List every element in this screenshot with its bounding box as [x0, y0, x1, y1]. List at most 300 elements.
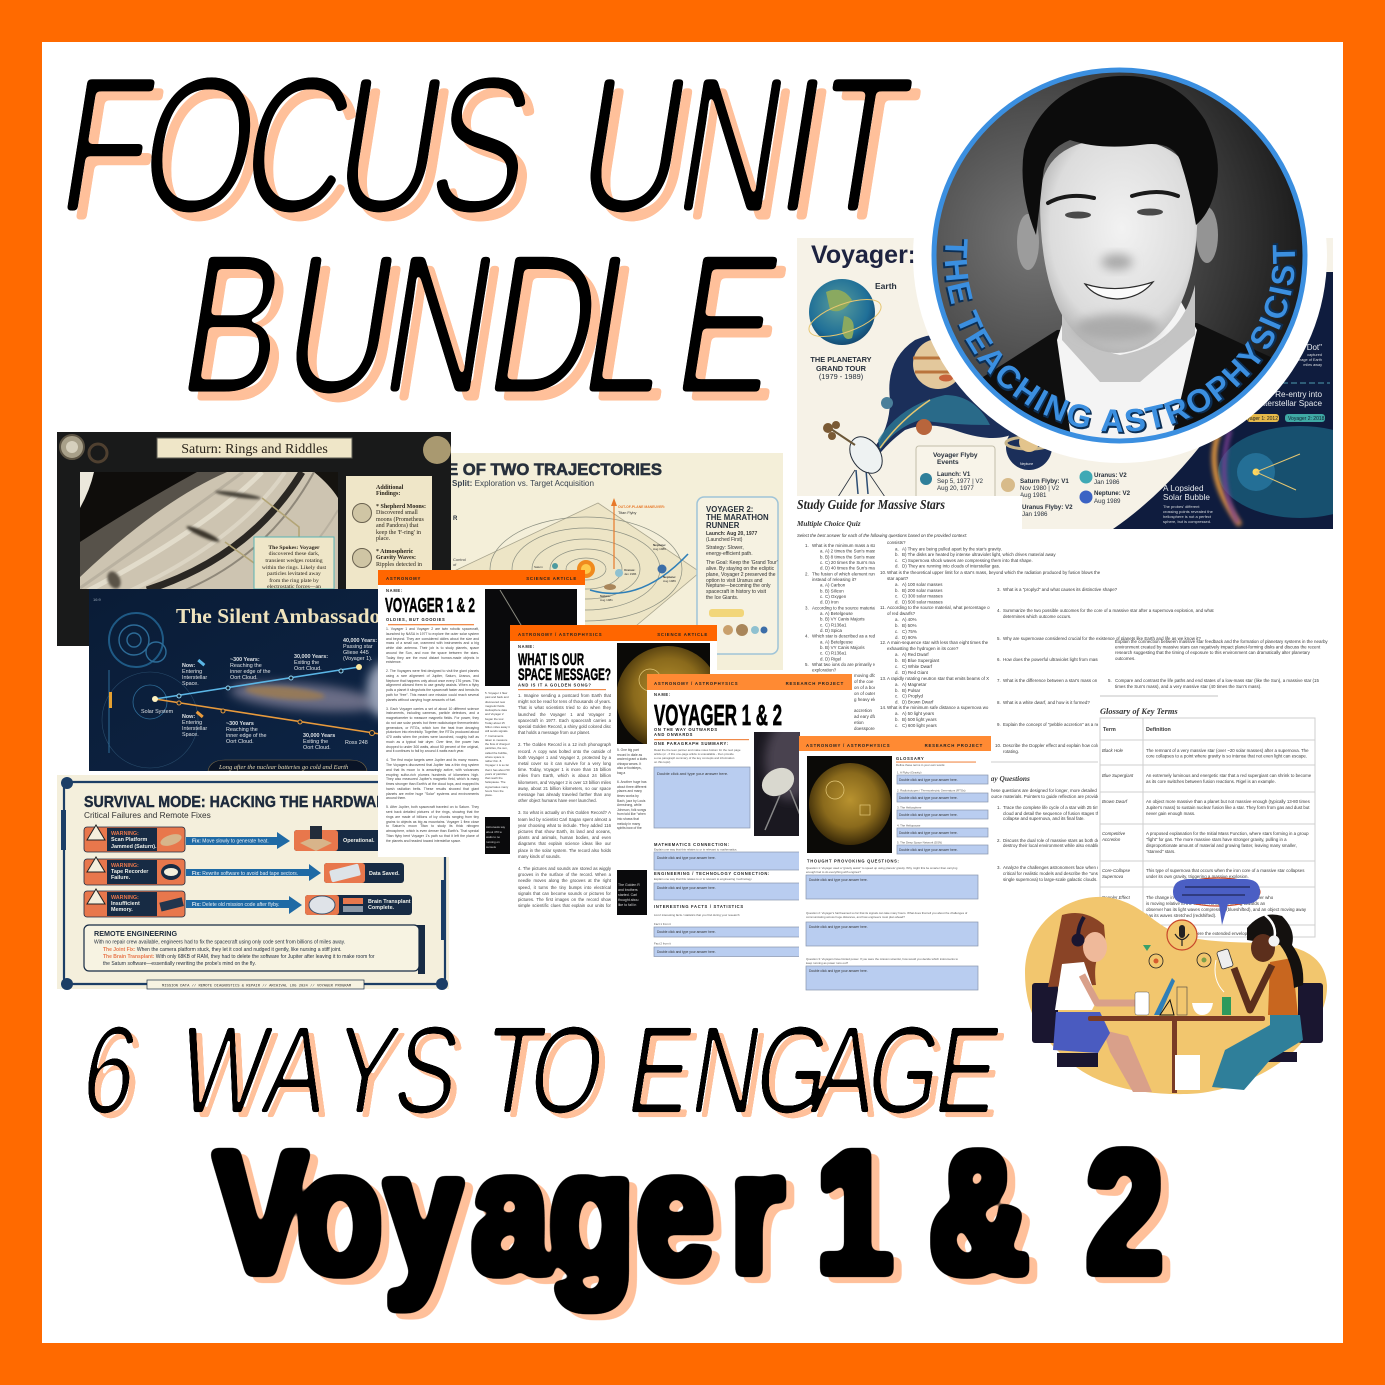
glossary table: An object more massive than a planet but not massive enough (typically 13-80 times	[1146, 799, 1311, 804]
section: glossary: 2. Radioisotopes / Thermoelectric Generators (RTGs)	[897, 788, 966, 792]
header bar: astronomy	[378, 570, 585, 585]
callout: the spokes: transient wedges rotating	[265, 558, 323, 564]
sheet title: VOYAGER 1 & 2	[654, 700, 782, 732]
panel: study guide for massive stars: C) 75%	[902, 629, 917, 634]
quiz column one: b.	[820, 554, 824, 559]
panel: study guide for massive stars: single supernova) to large-scale galactic clouds.	[1003, 877, 1097, 882]
nose shading	[1101, 254, 1133, 270]
callout: remote engineering: The Joint Fix: When the camera platform stuck, they let it cool and nudged it gently, like nursing a stiff joint.	[103, 947, 342, 953]
panel: study guide for massive stars: ource materials. Pointers to guide reflection are provided	[991, 794, 1103, 799]
quiz column one: ad eary dfc	[854, 714, 877, 719]
label: uranus flyby: Jan 1986	[1022, 511, 1048, 518]
shirt	[1057, 300, 1197, 445]
label: aspect ratio: 16:9	[93, 597, 102, 602]
icon: microphone badge	[1167, 920, 1197, 950]
quiz column one: According to the source material,	[812, 605, 877, 610]
panel: two trajectories slide	[451, 453, 783, 670]
panel: additional findings	[346, 476, 432, 591]
heading plaque: saturn: Saturn: Rings and Riddles	[181, 442, 328, 457]
sheet: what is our space message: thought abou	[618, 898, 638, 902]
panel: study guide for massive stars: D) 90%	[902, 635, 917, 640]
chin shading	[1075, 314, 1159, 342]
icon: compass rose	[423, 436, 451, 464]
orbital plane diagram: Aug 1989	[663, 579, 676, 583]
panel: additional findings: Gravity Waves:	[376, 555, 416, 561]
glossary table: has its waves stretched (redshifted).	[1146, 913, 1216, 918]
short answer questions: determines which outcome occurs.	[1003, 614, 1071, 619]
title: 6 ways to engage: 6 WAYS TO ENGAGE	[79, 1006, 1016, 1145]
row: scan platform: WARNING:	[111, 831, 139, 837]
glossary table: A class of star systems where the extended envelope from the	[1146, 931, 1267, 936]
callout: remote engineering: the Saturn software—essentially rewriting the probe's mind on the fly.	[103, 961, 256, 967]
sheet: voyager 1 and 2 science article: about 470 w	[486, 830, 503, 834]
row: tape recorder: Tape Recorder	[111, 869, 149, 875]
panel: study guide for massive stars: Trace the complete life cycle of a star with 25 times the	[1003, 805, 1111, 810]
sheet: golden record research project	[799, 736, 991, 992]
panel: study guide for massive stars: 14.	[880, 705, 886, 710]
timeline labels: Interstellar	[182, 726, 207, 732]
sheet: voyager 1 and 2 science article: NAME:	[386, 588, 403, 593]
panel: the silent ambassadors slide	[89, 589, 403, 771]
glossary table: "starved" stars.	[1146, 849, 1175, 854]
title: voyager 1 and 2: Voyager 1 & 2	[214, 1114, 1164, 1311]
image: golden record	[807, 756, 892, 853]
section: engineering connection	[654, 871, 800, 900]
quiz column one: exploration?	[812, 668, 837, 673]
heading: voyager: Voyager: The Grand Tour	[811, 241, 1109, 269]
caption: nuclear batteries	[208, 760, 367, 771]
panel: two trajectories slide: Control	[453, 557, 466, 562]
quiz column two: b.	[895, 588, 899, 593]
sheet title: VOYAGER 1 & 2	[385, 595, 475, 617]
panel: study guide for massive stars: a.	[895, 617, 899, 622]
panel: study guide for massive stars: Analyze the challenges astronomers face when modeling	[1003, 865, 1116, 870]
panel: survival mode slide	[57, 775, 449, 990]
row: insufficient memory: Memory.	[111, 907, 133, 913]
row: scan platform: Fix: Move slowly to generate heat.	[192, 838, 269, 844]
panel: study guide for massive stars: c.	[895, 629, 898, 634]
timeline labels: Gliese 445	[343, 650, 369, 656]
timeline labels: Reaching the	[226, 727, 258, 733]
section: glossary: GLOSSARY	[896, 756, 924, 761]
panel: voyager 2 marathon runner: option to visit Uranus and	[706, 578, 763, 584]
article body: 4. The first major targets were Jupiter and its many moons. The Voyagers discovered that Jupiter has a thin ring system and that its moon Io is amazingly active, with volcanoes erupting sulfur-rich plumes hundreds of kilometers high. They also measured Jupiter's magnetic field, which is many times stronger than Earth's at the cloud tops, and mapped its harsh radiation belts. These results showed that giant planets are entire huge "Solar" systems and environments around them.	[386, 758, 479, 800]
sheet: voyager 1 and 2 science article: sunsets	[486, 845, 497, 849]
eyebrows	[1048, 192, 1178, 203]
quiz column one: C) R136a1	[825, 651, 847, 656]
header bar	[799, 736, 991, 751]
orbital plane diagram: Jan 1986	[624, 572, 637, 576]
subheading: multiple choice quiz: Multiple Choice Quiz	[796, 520, 861, 528]
panel: study guide for massive stars: What is the minimum safe distance a supernova wo	[887, 705, 989, 710]
article body	[518, 693, 611, 909]
quiz column two: C) 300 solar masses	[902, 594, 943, 598]
section: interesting facts: Double click and type your answer here.	[657, 950, 716, 954]
sheet: what is our space message: SPACE MESSAGE?	[518, 666, 611, 684]
panel: additional findings: and Pandora) that	[376, 522, 419, 529]
quiz column one: d.	[820, 600, 824, 605]
quiz column two: What is the theoretical upper limit for a star's mass, beyond which the radiation produced by fusion blows the	[887, 570, 1101, 575]
panel: study guide for massive stars: b.	[895, 623, 899, 628]
panel: flyby events: Launch: V1	[937, 471, 971, 478]
quiz column one: a.	[820, 611, 824, 616]
panel: additional findings: keep the 'F-ring' in	[376, 530, 421, 536]
quiz column one: b.	[820, 617, 824, 622]
figure: left listener	[1048, 913, 1152, 1092]
panel: study guide for massive stars: 8.	[997, 700, 1001, 705]
section: mathematics connection: Explain one way that this relates to or is relevant to mathematics.	[654, 848, 737, 852]
timeline labels: Oort Cloud.	[294, 666, 322, 672]
quiz column one: c.	[820, 560, 823, 565]
label: uranus v2: Uranus: V2	[1094, 472, 1127, 479]
panel: voyager 2 marathon runner: (Launched First)	[706, 537, 743, 543]
glossary table: Supernova	[1102, 874, 1124, 879]
section: interesting facts: Double click and type your answer here.	[657, 930, 716, 934]
section: one paragraph summary: Read the the teen partner and make notes bottom for the next page	[654, 748, 741, 752]
timeline labels: (Voyager 1).	[343, 656, 372, 662]
article body	[386, 627, 479, 857]
icon: corner medallion	[60, 435, 107, 462]
glossary table: A proposed explanation for the Initial Mass Function, where stars forming in a group	[1146, 831, 1309, 836]
article body: 1. Voyager 1 and Voyager 2 are twin robotic spacecraft, launched by NASA in 1977 to explore the outer solar system and beyond. They are considered oldies about the size and mass of a small car, crammed with instruments and a big white dish antenna. Their job is to study planets, space around the Sun, and now the space between the stars. Today they are the most distant human-made objects in existence.	[386, 627, 479, 664]
timeline labels: Reaching the	[230, 663, 262, 669]
timeline labels: inner edge of the	[226, 733, 266, 739]
panel: study guide for massive stars: b.	[895, 717, 899, 722]
section: interesting facts: List 2 interesting facts / statistics that you find during your research:	[654, 913, 740, 917]
quiz column two: consists?	[887, 540, 906, 545]
panel: study guide for massive stars: How does the powerful ultraviolet light from massive stars	[1003, 657, 1117, 662]
caption: nuclear batteries: Long after the nuclear batteries go cold and Earth	[218, 764, 348, 771]
trajectory lines	[152, 664, 380, 736]
image: saturn ring close-up	[80, 472, 338, 600]
section: engineering connection: ENGINEERING / TECHNOLOGY CONNECTION:	[654, 871, 770, 876]
section: glossary: 4. The Heliopause	[897, 824, 921, 828]
panel: flyby events: Sep 5, 1977 | V2	[937, 478, 984, 485]
article body: 1. Imagine sending a postcard from Earth that might not be read for tens of thousands of years. That is what scientists tried to do when they launched the Voyager 1 and Voyager 2 spacecraft in 1977. Each spacecraft carries a special Golden Record, a shiny gold colored disc that holds a message from our planet.	[518, 693, 611, 735]
quiz column two: a.	[895, 582, 899, 587]
timeline labels: Entering	[182, 669, 202, 675]
quiz column one: A) 2 times the Sun's mass	[825, 549, 877, 554]
glossary table: An extremely luminous and energetic star that a red supergiant can shrink to become	[1146, 773, 1312, 778]
quiz column one: c.	[820, 594, 823, 599]
glossary table: Term	[1103, 727, 1116, 733]
panel: study guide for massive stars: cloud and detail the sequence of fusion stages through	[1003, 811, 1111, 816]
footer strip: mission data	[147, 980, 364, 989]
sheet: voyager 1 and 2 science article: running on	[486, 840, 500, 844]
curved name: THE TEACHING ASTROPHYSICIST	[944, 239, 1295, 432]
section: glossary	[896, 756, 988, 854]
section: glossary: 3. The Heliosphere	[897, 806, 922, 810]
section: one paragraph summary: a one paragraph summary of the key concepts and information	[654, 756, 735, 760]
sidebar text: 5. One big part record in diale as ancient grant a kiwis chirapa wears. It also w footsteps, bag a	[617, 748, 647, 775]
quiz column two: A) 100 solar masses	[902, 582, 943, 587]
panel: heliosphere: A Lopsided	[1163, 484, 1204, 493]
neck	[1062, 285, 1195, 382]
quiz column one: C) 20 times the Sun's mass	[825, 560, 880, 565]
section: glossary: Double click and type your answer here.	[899, 796, 958, 800]
quiz column one: c.	[820, 622, 823, 627]
quiz column one: D) Rigel	[825, 656, 841, 661]
panel: heliosphere: miles away	[1303, 363, 1322, 367]
timeline labels: 40,000 Years:	[343, 638, 377, 644]
panel: study guide for massive stars: What is the difference between a star's mass on the main	[1003, 678, 1116, 683]
quiz column one: accretion	[854, 708, 873, 713]
sidebar text	[617, 748, 647, 866]
panel: additional findings: moons (Prometheus	[376, 516, 424, 523]
panel: study guide for massive stars: d.	[895, 670, 899, 675]
quiz column one: b.	[820, 588, 824, 593]
glossary table: is moving relative to the source. An object moving towards an	[1146, 901, 1266, 906]
subheading: critical failures: Critical Failures and Remote Fixes	[84, 810, 211, 820]
label: planetary grand tour: (1979 - 1989)	[819, 372, 863, 381]
orbital plane diagram	[456, 498, 696, 625]
page: essay answers and glossary: 5.	[1108, 678, 1112, 683]
icons: heart and leaf badges	[1143, 945, 1211, 968]
callout: remote engineering: With no repair crew available, engineers had to fix the spacecraft using only code sent from billions of miles away.	[94, 940, 345, 946]
heading: the silent ambassadors: The Silent Ambassadors	[176, 604, 398, 628]
orbital plane diagram: Saturn:	[600, 594, 611, 598]
panel: study guide for massive stars: exhausting the hydrogen in its core?	[887, 646, 959, 651]
quiz column one: on of outer	[854, 691, 876, 696]
section: interesting facts: Fact 2 from it	[654, 942, 671, 946]
quiz column one: B) 8 times the Sun's mass	[825, 554, 877, 559]
panel: study guide for massive stars: Essay Questions	[979, 774, 1030, 783]
speech bubble	[1173, 878, 1260, 925]
glossary table: Doppler Effect	[1102, 895, 1131, 900]
curved name: THE TEACHING ASTROPHYSICIST	[942, 239, 1297, 434]
quiz column one: A) Betelgeuse	[825, 611, 853, 616]
panel: flyby events	[916, 446, 996, 496]
panel: voyager 2 marathon runner: plane, Voyager 2 preserved the	[706, 572, 776, 578]
callout: remote engineering: The Brain Transplant: With only 68KB of RAM, they had to delete the software for Jupiter after leaving it to make room for	[103, 954, 375, 960]
quiz column two	[880, 540, 1101, 604]
orbital plane diagram: Titan Flyby	[618, 511, 637, 515]
page: essay answers and glossary: research suggesting that the timing of exposure to this environment can dramatically alter planetary	[1115, 650, 1311, 655]
timeline labels: Oort Cloud.	[303, 745, 331, 751]
panel: heliosphere: captured	[1307, 353, 1322, 357]
icon: blueprint gears	[102, 613, 198, 768]
panel: voyager 2 marathon runner: RUNNER	[706, 521, 740, 530]
row: scan platform: Scan Platform	[111, 837, 147, 843]
footer strip: mission data: MISSION DATA // REMOTE DIAGNOSTICS & REPAIR // ARCHIVAL LOG 2024 // VOYAGER PROGRAM	[162, 984, 352, 988]
panel: study guide for massive stars: d.	[895, 700, 899, 704]
sheet: voyager 1 and 2 research project	[647, 674, 852, 958]
quiz column one: 3.	[805, 605, 809, 610]
panel: study guide for massive stars: a.	[895, 652, 899, 657]
sheet: voyager 1 and 2 science article	[378, 570, 585, 857]
panel: study guide for massive stars: B) Pulsar	[902, 688, 921, 693]
sheet: voyager 1 and 2 research project: AND ONWARDS	[654, 732, 693, 737]
callout: the spokes: from the ring plate by	[269, 577, 319, 584]
glossary table: The remnant of a very massive star (over ~20 solar masses) after a supernova. The	[1146, 748, 1309, 753]
orbital plane diagram: Aug 1989	[653, 547, 666, 551]
section: one paragraph summary: on this topic)	[654, 760, 670, 764]
figure: right listener	[1212, 914, 1303, 1090]
panel: study guide for massive stars: c.	[895, 723, 898, 728]
panel: voyager 2 marathon runner: alive. By staying on the ecliptic	[706, 566, 775, 572]
quiz column one: D) Iron	[825, 600, 839, 605]
panel: voyager 2 marathon runner: Neptune—becoming the only	[706, 583, 771, 589]
article body: 2. The Golden Record is a 12 inch phonograph record. A copy was bolted onto the outside of both Voyager 1 and Voyager 2, protected by a metal cover so it can survive for a very long time. Today, Voyager 1 is more than 15 billion miles from Earth, which is about 24 billion kilometers, and Voyager 2 is over 13 billion miles away, about 21 billion kilometers, so our space message has already traveled farther than any other object humans have ever launched.	[518, 742, 611, 803]
panel: study guide for massive stars: of red dwarfs?	[887, 611, 916, 616]
glossary table: Accretion	[1101, 837, 1121, 842]
callout: the spokes: discovered these dark,	[269, 551, 320, 557]
icon: saturn circle: Neptune	[1020, 462, 1033, 466]
header bar: astronomy astrophysics: SCIENCE ARTICLE	[657, 632, 708, 637]
smile	[1085, 282, 1153, 299]
orbital plane diagram: Neptune:	[663, 575, 676, 579]
panel: study guide for massive stars: collapse and supernova, and its final fate.	[1003, 816, 1085, 821]
panel: study guide for massive stars: According to the source material, what percentage of	[887, 605, 992, 610]
panel: study guide for massive stars: 11.	[880, 605, 886, 610]
label: neptune v2	[1080, 490, 1131, 505]
glossary table: as its core switches between fusion reactions. Rigel is an example.	[1146, 779, 1276, 784]
label: uranus v2: Jan 1986	[1094, 479, 1120, 486]
panel: two trajectories slide: of	[453, 562, 457, 567]
panel: study guide for massive stars: C) Proplyd	[902, 694, 923, 698]
image: spacecraft in dark space	[485, 589, 577, 686]
panel: voyager 2 marathon runner: energy-efficient path.	[706, 551, 753, 557]
quiz column two: c.	[895, 558, 898, 563]
row: tape recorder	[84, 857, 404, 885]
article body: 5. After Jupiter, both spacecraft traveled on to Saturn. They sent back detailed pictures of the rings, showing that the rings are made of billions of icy chunks ranging from tiny grains to objects as big as mountains. Voyager 1 flew close to Saturn's moon Titan to study its thick nitrogen atmosphere, which is even denser than Earth's. That special Titan flyby bent Voyager 1's path so that it left the plane of the planets and headed toward interstellar space.	[386, 805, 479, 842]
orbital plane diagram: OUT-OF-PLANE MANEUVER:	[618, 505, 665, 509]
quiz column one: B) VY Canis Majoris	[825, 645, 865, 650]
quiz column one: The fusion of which element runs	[812, 571, 878, 576]
label: planetary grand tour: GRAND TOUR	[816, 364, 867, 373]
panel: additional findings: place.	[376, 536, 391, 542]
timeline labels: ~300 Years	[226, 721, 254, 727]
panel: study guide for massive stars: Explain the concept of "pebble accretion" as a new model	[1003, 722, 1116, 727]
panel: study guide for massive stars: B) 50%	[902, 623, 917, 628]
panel: study guide for massive stars: 1.	[997, 805, 1001, 810]
section: one paragraph summary: Double click and type your answer here.	[657, 771, 728, 776]
hair	[1022, 76, 1218, 235]
sidebar text: 5. Voyager 1 flew past and back and discovered new magnetic fields. Heliosphere data and Voyager 2 began the tour. Today about 15 billion miles away it still sends signals. 7. Instruments taken to measure the flow of charged particles, the sun, called the bubble, where space is rather thin. 8. Voyager 1 is so far that it has about 50 years of particles that reach the heliopause. The signal takes many hours from the place.	[485, 691, 510, 797]
panel: voyager 2 marathon runner	[697, 497, 778, 654]
panel: study guide for massive stars: Describe the Doppler effect and explain how colors show	[1003, 743, 1115, 748]
quiz column one: B) Silicon	[825, 588, 844, 593]
quiz column one: d.	[820, 566, 824, 571]
timeline labels: Oort Cloud.	[230, 675, 258, 681]
quiz column one	[805, 543, 880, 731]
panel: study guide for massive stars: hese questions are designed for longer, more detailed	[991, 788, 1097, 793]
sheet: what is our space message: started. Carl	[618, 893, 637, 897]
panel: additional findings: Additional	[376, 485, 404, 491]
row: insufficient memory: Insufficient	[111, 901, 140, 907]
quiz column one: moving dfc	[854, 673, 876, 678]
page: essay answers and glossary	[1099, 639, 1334, 940]
header bar	[647, 674, 852, 690]
panel: study guide for massive stars: C) 600 light years	[902, 723, 938, 728]
sheet: what is our space message: NAME:	[518, 644, 535, 649]
quiz column one: Which star is described as a red?	[812, 634, 878, 639]
panel: study guide for massive stars: 12.	[880, 640, 886, 645]
section: glossary: 1. A Flyby (Gravity)	[897, 770, 921, 774]
timeline labels: ~300 Years:	[230, 657, 260, 663]
panel: study guide for massive stars: C) White Dwarf	[902, 664, 933, 669]
panel: study guide for massive stars: rotating.	[1003, 749, 1019, 754]
quiz column one: B) VY Canis Majoris	[825, 617, 865, 622]
quiz column one: d.	[820, 656, 824, 661]
image: voyager in space	[754, 732, 800, 836]
quiz column two: D) 500 solar masses	[902, 600, 943, 604]
row: scan platform	[84, 825, 404, 852]
panel: heliosphere: heliosphere is not a perfect	[1163, 514, 1212, 519]
panel: study guide for massive stars: 7.	[997, 678, 1001, 683]
quiz column one: a.	[820, 583, 824, 588]
sheet: voyager 1 and 2 science article: OLDIES, BUT GOODIES	[386, 617, 445, 622]
sheet title: WHAT IS OUR	[518, 651, 584, 669]
row: tape recorder: Data Saved.	[369, 871, 400, 877]
panel: study guide for massive stars: 2.	[997, 838, 1001, 843]
instructions: Select the best answer for each of the following questions based on the provided context:	[797, 533, 968, 538]
label: saturn flyby: Saturn Flyby: V1	[1020, 478, 1069, 485]
quiz column two: B) 200 solar masses	[902, 588, 943, 593]
short answer questions	[997, 587, 1214, 641]
sheet: voyager 1 and 2 research project: NAME:	[654, 692, 671, 697]
panel: heliosphere: sphere, but is compressed.	[1163, 519, 1211, 524]
icon: satellites	[196, 659, 205, 718]
panel: heliosphere: image of Earth	[1297, 358, 1322, 362]
section: thought provoking questions: Question 3: Voyagers have limited power. If you were the mission scientist, how would you decide which instruments to	[806, 957, 958, 961]
sheet: what is our space message: The Golden R	[618, 883, 640, 887]
header bar: astronomy astrophysics: ASTRONOMY / ASTROPHYSICS	[518, 632, 602, 637]
section: thought provoking questions: Question 2: Voyager's hail beamed so far that its signals can take many hours. What does that tell you about the challenges of	[806, 911, 967, 915]
sheet: voyager 1 and 2 science article: watts to no	[486, 835, 500, 839]
sheet: what is our space message: and brothers	[618, 888, 638, 892]
quiz column one: 4.	[805, 634, 809, 639]
panel: voyager 2 marathon runner: Launch: Aug 20, 1977	[706, 531, 757, 537]
header bar: astronomy: SCIENCE ARTICLE	[526, 576, 577, 581]
panel: study guide for massive stars: destroy their local environment while also enabling new	[1003, 843, 1112, 848]
panel: additional findings: * Atmospheric	[376, 549, 414, 555]
title: focus unit: FOCUS UNIT	[56, 44, 933, 263]
quiz column two: D) They are running into clouds of interstellar gas.	[902, 564, 1000, 568]
quiz column two: c.	[895, 594, 898, 598]
orbital plane diagram: Uranus:	[624, 568, 635, 572]
image: golden record	[617, 643, 710, 744]
quiz column two: B) The disks are heated by intense ultraviolet light, which drives material away	[902, 552, 1056, 557]
panel: heliosphere: Voyager 2: 2018	[1288, 416, 1325, 422]
label: uranus v2	[1080, 470, 1126, 484]
callout: the spokes: electrostatic forces—an	[267, 583, 321, 590]
timeline labels: 30,000 Years	[303, 733, 335, 739]
jacket	[940, 323, 1300, 460]
section: one paragraph summary: article (or - if this one-page article is unavailable - then provide	[654, 752, 734, 756]
quiz column one: instead of releasing it?	[812, 577, 857, 582]
panel: study guide for massive stars: D) Brown Dwarf	[902, 700, 934, 704]
title: 6 ways to engage: 6 WAYS TO ENGAGE	[73, 1001, 1010, 1140]
callout: remote engineering: REMOTE ENGINEERING	[94, 929, 177, 938]
timeline labels: Now:	[182, 663, 195, 669]
panel: voyager 2 marathon runner: THE MARATHON	[706, 513, 769, 522]
quiz column one: 1.	[805, 543, 809, 548]
label: planetary grand tour: THE PLANETARY	[810, 355, 872, 364]
panel: study guide for massive stars: 10.	[995, 743, 1001, 748]
short answer questions: What is a "proplyd" and what causes its distinctive shape?	[1003, 587, 1118, 592]
glossary table: Blue Supergiant	[1102, 773, 1134, 778]
section: engineering connection: Explain one way that this relates to or is relevant to engineering / technology.	[654, 877, 752, 881]
short answer questions: Summarize the two possible outcomes for the core of a massive star after a supernova explosion, and what	[1003, 608, 1214, 613]
section: glossary: 5. The Deep Space Network (DSN)	[897, 840, 942, 844]
row: tape recorder: WARNING:	[111, 863, 139, 869]
timeline labels: inner edge of the	[230, 669, 270, 675]
quiz column one: a.	[820, 639, 824, 644]
short answer questions: Why are supernovae considered crucial for the existence of planets like Earth and life as we know it?	[1003, 636, 1201, 641]
panel: voyager 2 marathon runner: VOYAGER 2:	[706, 505, 753, 514]
page: essay answers and glossary: Explain the connection between massive star feedback and the formation of planetary systems in the nearby	[1115, 639, 1328, 644]
